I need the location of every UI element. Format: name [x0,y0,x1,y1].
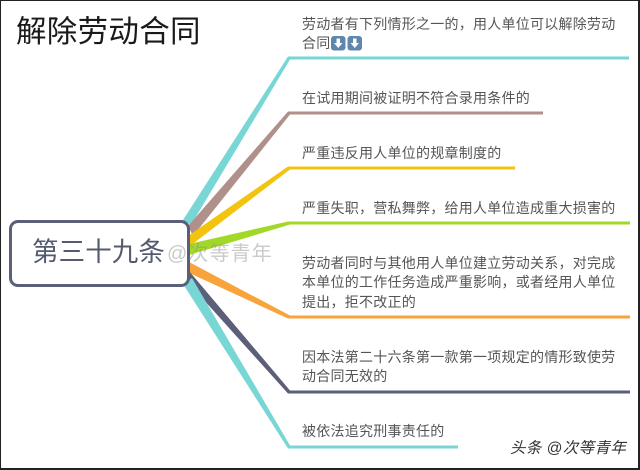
text: concurrent employment: 本单位的工作任务造成严重影响，或者经用人单位 [302,274,616,290]
branch 7: cyan [183,278,458,448]
central node: article 39 [9,220,190,287]
text: invalid contract: 因本法第二十六条第一款第一项规定的情形致使劳 [302,349,616,365]
branch 1: cyan [183,56,629,225]
watermark: @次等青年 [167,243,273,265]
branch 3: yellow [188,166,515,246]
branch 6: dark slate [185,271,630,394]
text: probation: 在试用期间被证明不符合录用条件的 [302,90,530,106]
source credit: 头条 @次等青年 [510,440,626,457]
text: invalid contract: 动合同无效的 [302,368,388,384]
branch 2: brown [188,112,543,236]
branch 4: green [189,222,630,255]
text: rule violation: 严重违反用人单位的规章制度的 [302,145,502,161]
text: serious neglect: 严重失职，营私舞弊，给用人单位造成重大损害的 [302,200,616,216]
icon: down arrows [331,36,362,50]
text: intro clause: 合同 [302,35,330,51]
text: criminal liability: 被依法追究刑事责任的 [302,423,444,439]
text: intro clause: 劳动者有下列情形之一的，用人单位可以解除劳动 [302,16,616,32]
text: concurrent employment: 劳动者同时与其他用人单位建立劳动关系，对完成 [302,255,616,271]
text: concurrent employment: 提出，拒不改正的 [302,294,416,310]
title: 解除劳动合同 [16,15,201,49]
text: invalid contract [302,349,616,384]
branch 5: orange [187,262,630,318]
text: concurrent employment [302,255,616,310]
central node: article 39: 第三十九条 [32,237,165,267]
text: intro clause [302,16,616,51]
